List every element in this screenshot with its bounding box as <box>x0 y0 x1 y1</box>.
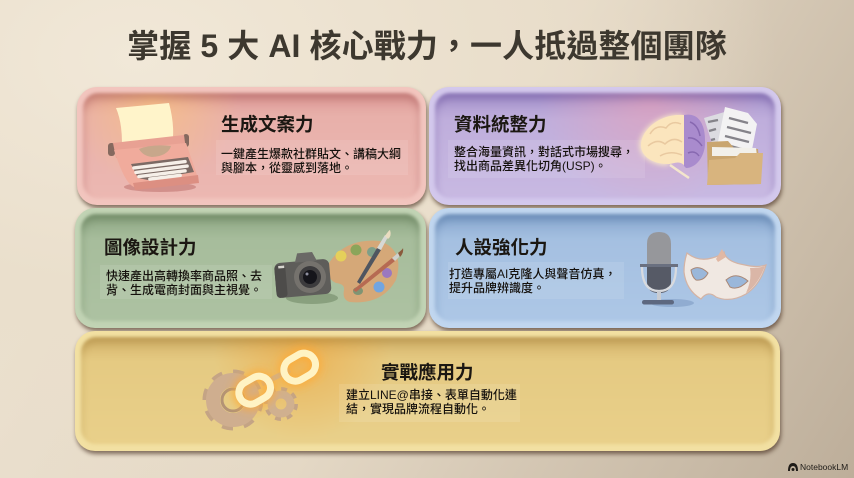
panel: 實戰應用力 <box>75 331 780 451</box>
icon: gears and glowing chain <box>202 346 325 430</box>
heading: 圖像設計力: 圖像設計力 <box>104 237 197 258</box>
text: 生成文案力 description <box>221 147 401 175</box>
text: 圖像設計力 description <box>106 269 262 297</box>
icon: typewriter <box>108 103 199 192</box>
brand mark: NotebookLM: NotebookLM <box>800 462 848 472</box>
text: 資料統整力 description: 找出商品差異化切角(USP)。 <box>454 159 607 173</box>
text: 資料統整力 description: 整合海量資訊，對話式市場搜尋， <box>454 145 634 159</box>
text: 人設強化力 description: 打造專屬AI克隆人與聲音仿真， <box>449 267 616 281</box>
panel: 人設強化力 <box>429 208 781 328</box>
heading: 資料統整力: 資料統整力 <box>454 114 547 135</box>
text: 生成文案力 description: 一鍵產生爆款社群貼文、講稿大綱 <box>221 147 401 161</box>
text: 圖像設計力 description: 背、生成電商封面與主視覺。 <box>106 283 262 297</box>
icon: camera and palette <box>274 230 404 304</box>
panel: 圖像設計力 <box>75 208 426 328</box>
text: 實戰應用力 description <box>346 388 517 416</box>
title: 掌握 5 大 AI 核心戰力，一人抵過整個團隊 <box>127 28 727 64</box>
text: 圖像設計力 description: 快速產出高轉換率商品照、去 <box>106 269 262 283</box>
icon: brain, documents and folder <box>637 107 763 185</box>
icon: microphone and mask <box>640 232 767 307</box>
panel: 資料統整力 <box>429 87 781 205</box>
panel: 生成文案力 <box>77 87 426 205</box>
text: 實戰應用力 description: 建立LINE@串接、表單自動化連 <box>346 388 517 402</box>
text: 人設強化力 description: 提升品牌辨識度。 <box>449 281 545 295</box>
heading: 實戰應用力: 實戰應用力 <box>381 362 474 383</box>
text: 生成文案力 description: 與腳本，從靈感到落地。 <box>221 161 353 175</box>
text: 人設強化力 description <box>449 267 616 295</box>
heading: 生成文案力: 生成文案力 <box>221 114 314 135</box>
text: 實戰應用力 description: 結，實現品牌流程自動化。 <box>346 402 490 416</box>
text: 資料統整力 description <box>454 145 634 173</box>
heading: 人設強化力: 人設強化力 <box>455 237 548 258</box>
